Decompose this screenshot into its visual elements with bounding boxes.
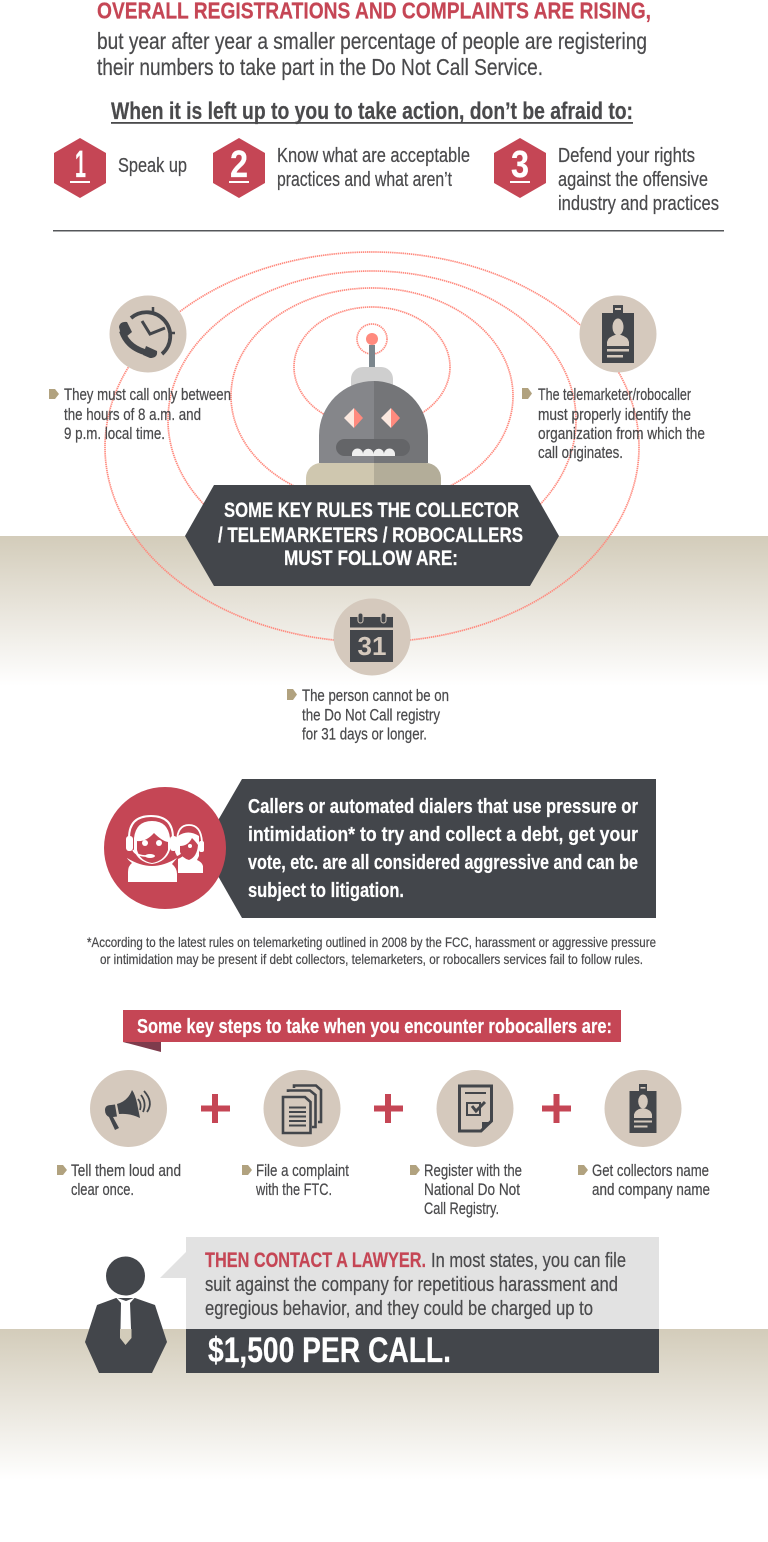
signal rings bbox=[105, 252, 639, 642]
banner: key rules: SOME KEY RULES THE COLLECTOR bbox=[224, 499, 519, 522]
callout: aggressive callers: vote, etc. are all considered aggressive and can be bbox=[248, 852, 638, 874]
callout: aggressive callers: intimidation* to try and collect a debt, get your bbox=[248, 824, 638, 846]
intro text: but year after year a smaller percentage of people are registering bbox=[97, 28, 647, 54]
step 3 text: National Do Not bbox=[424, 1181, 520, 1199]
action 3: defend rights: 3 bbox=[511, 144, 529, 186]
action 3: defend rights: industry and practices bbox=[558, 193, 719, 215]
speech bubble: contact a lawyer: THEN CONTACT A LAWYER. bbox=[205, 1249, 426, 1272]
action 3: defend rights bbox=[494, 138, 719, 215]
plus 1 bbox=[201, 1094, 230, 1123]
rule: identify organization text: must properly identify the bbox=[538, 406, 691, 424]
step 2 text: File a complaint bbox=[256, 1162, 349, 1180]
rule: calendar icon: 31 bbox=[358, 631, 386, 661]
action 3: defend rights: against the offensive bbox=[558, 169, 708, 191]
heading: take action: When it is left up to you to take action, don’t be afraid to: bbox=[111, 98, 633, 125]
action 3: defend rights: Defend your rights bbox=[558, 145, 695, 167]
step 4: id badge icon bbox=[604, 1070, 682, 1147]
step 4 text: and company name bbox=[592, 1181, 710, 1199]
rule: calendar icon bbox=[334, 598, 410, 676]
action 1: speak up: Speak up bbox=[118, 155, 187, 177]
callout: aggressive callers bbox=[202, 779, 656, 918]
action 2: know practices: Know what are acceptable bbox=[277, 145, 470, 167]
rule: calling hours text bbox=[49, 386, 231, 443]
step 1 text bbox=[57, 1162, 181, 1199]
step 3 text bbox=[410, 1162, 522, 1218]
rule: calling hours text: 9 p.m. local time. bbox=[64, 425, 165, 443]
action 1: speak up: 1 bbox=[75, 144, 86, 186]
rule: registry text: the Do Not Call registry bbox=[302, 706, 441, 724]
step 1: megaphone icon bbox=[90, 1070, 167, 1147]
rule: registry text: The person cannot be on bbox=[302, 687, 449, 705]
banner: key rules bbox=[185, 485, 559, 586]
action 2: know practices: 2 bbox=[230, 144, 248, 186]
plus 2 bbox=[374, 1094, 403, 1123]
step 4 text bbox=[578, 1162, 710, 1199]
rule: clock icon bbox=[110, 296, 186, 372]
background band: bottom bbox=[0, 1329, 768, 1480]
background band: rules bbox=[0, 536, 768, 686]
rule: id badge icon bbox=[580, 296, 656, 372]
callout: aggressive callers: Callers or automated dialers that use pressure or bbox=[248, 796, 638, 818]
step 2: documents icon bbox=[264, 1070, 340, 1147]
action 1: speak up bbox=[54, 138, 187, 198]
penalty bar: $1,500 PER CALL. bbox=[208, 1331, 451, 1370]
step 3 text: Register with the bbox=[424, 1162, 522, 1180]
plus 3 bbox=[542, 1094, 571, 1123]
intro text bbox=[97, 0, 651, 80]
robot bbox=[306, 324, 441, 486]
rule: registry text bbox=[287, 687, 449, 744]
rule: registry text: for 31 days or longer. bbox=[302, 726, 427, 744]
rule: calling hours text: the hours of 8 a.m. and bbox=[64, 406, 201, 424]
rule: identify organization text: organization from which the bbox=[538, 425, 705, 443]
banner: key rules: MUST FOLLOW ARE: bbox=[284, 547, 458, 570]
icon: lawyer figure bbox=[85, 1256, 167, 1373]
speech bubble: contact a lawyer bbox=[160, 1237, 659, 1329]
speech bubble: contact a lawyer: In most states, you can file bbox=[431, 1250, 626, 1272]
action 2: know practices bbox=[213, 138, 470, 198]
step 3: checklist icon bbox=[436, 1070, 514, 1147]
step 2 text bbox=[242, 1162, 349, 1199]
ribbon: key steps heading bbox=[123, 1010, 621, 1052]
callout: aggressive callers: subject to litigation. bbox=[248, 880, 404, 902]
action 2: know practices: practices and what aren’t bbox=[277, 169, 452, 191]
rule: identify organization text: The telemarketer/robocaller bbox=[538, 386, 691, 404]
step 1 text: clear once. bbox=[71, 1181, 134, 1199]
step 3 text: Call Registry. bbox=[424, 1200, 499, 1218]
rule: identify organization text: call originates. bbox=[538, 444, 623, 462]
rule: identify organization text bbox=[522, 386, 705, 462]
step 4 text: Get collectors name bbox=[592, 1162, 709, 1180]
step 1 text: Tell them loud and bbox=[71, 1162, 181, 1180]
penalty bar bbox=[186, 1329, 659, 1373]
speech bubble: contact a lawyer: egregious behavior, and they could be charged up to bbox=[205, 1298, 593, 1320]
icon: call centre agents bbox=[104, 787, 226, 909]
footnote bbox=[87, 934, 656, 967]
ribbon: key steps heading: Some key steps to take when you encounter robocallers are: bbox=[137, 1016, 612, 1038]
footnote: or intimidation may be present if debt collectors, telemarketers, or robocallers services fail to follow rules. bbox=[100, 951, 643, 967]
speech bubble: contact a lawyer: suit against the company for repetitious harassment and bbox=[205, 1274, 618, 1296]
rule: calling hours text: They must call only between bbox=[64, 386, 231, 404]
banner: key rules: / TELEMARKETERS / ROBOCALLERS bbox=[218, 524, 523, 547]
intro text: their numbers to take part in the Do Not Call Service. bbox=[97, 54, 543, 80]
step 2 text: with the FTC. bbox=[255, 1181, 332, 1199]
footnote: *According to the latest rules on telemarketing outlined in 2008 by the FCC, harassment or aggressive pressure bbox=[87, 934, 656, 950]
